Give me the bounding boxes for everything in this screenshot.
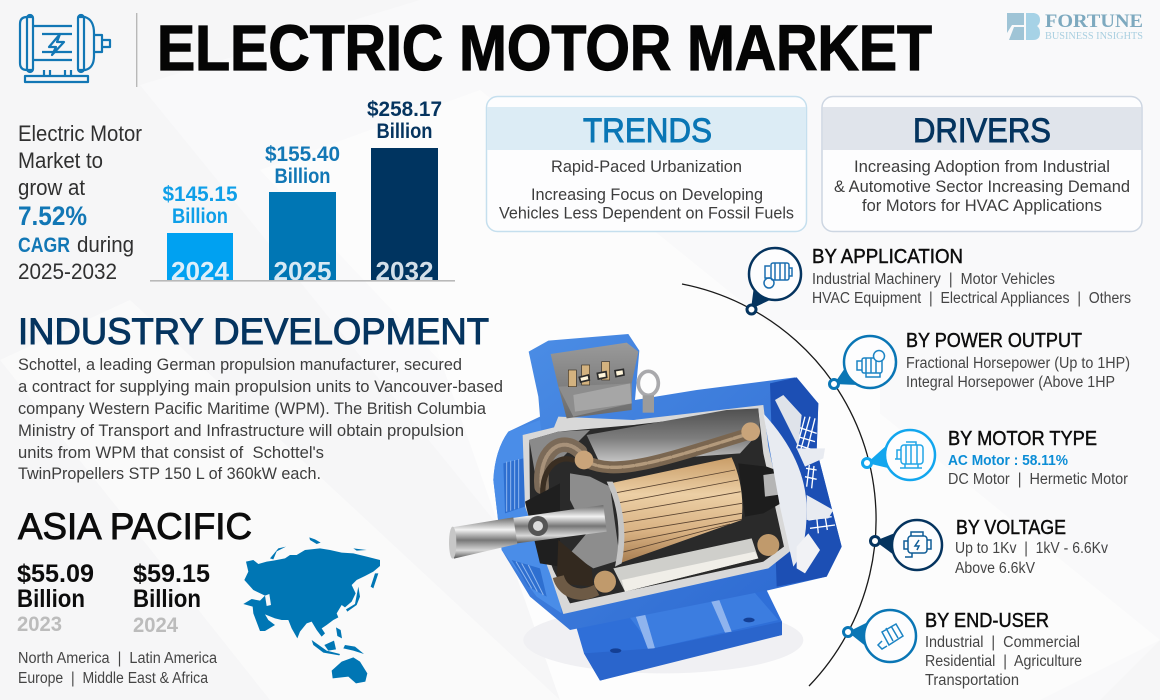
CAGR text block: 2025-2032 (18, 259, 117, 284)
segment: by motor type (862, 428, 1128, 488)
CAGR text block: Electric Motor (18, 121, 142, 146)
terminal box (551, 343, 638, 418)
segment: by end-user (844, 610, 1082, 689)
panel: trends: Increasing Focus on Developing (531, 185, 763, 204)
segment: by voltage: Up to 1Kv | 1kV - 6.6Kv (955, 540, 1108, 557)
segment: by motor type: BY MOTOR TYPE (948, 428, 1097, 450)
shaft (449, 505, 607, 559)
bar 2025: Billion (274, 164, 330, 188)
divider (136, 13, 137, 87)
stat: 2024 (133, 560, 210, 637)
icon: motor with gauge (857, 350, 884, 377)
stator lower (613, 538, 758, 592)
panel: drivers: DRIVERS (913, 112, 1051, 150)
illustration: electric motor cutaway (449, 334, 842, 681)
segment: by power output: Integral Horsepower (Above 1HP (906, 374, 1115, 391)
text block: industry development: units from WPM that consist of Schottel's (18, 443, 324, 462)
bar 2025: $155.40 (265, 142, 340, 166)
segment: by application: BY APPLICATION (812, 246, 963, 268)
housing (493, 334, 842, 630)
text block: industry development: TwinPropellers STP 150 L of 360kW each. (18, 464, 321, 483)
stator upper (587, 408, 760, 463)
panel: trends: TRENDS (583, 112, 712, 150)
bar 2024: $145.15 (162, 182, 238, 206)
segment: by motor type: DC Motor | Hermetic Motor (948, 471, 1128, 488)
logo: Fortune Business Insights: BUSINESS INSIGHTS (1045, 31, 1143, 42)
bar 2024: 2024 (171, 256, 230, 286)
segment: by motor type: AC Motor : 58.11% (948, 453, 1068, 469)
segment: by application: HVAC Equipment | Electrical Appliances | Others (812, 290, 1131, 307)
CAGR text block: CAGR (18, 234, 70, 257)
eye bolt (638, 371, 658, 413)
pin (830, 336, 896, 388)
stat: 2023: 2023 (17, 613, 62, 636)
stat: 2023: $55.09 (17, 560, 94, 588)
segment: by power output (830, 330, 1130, 391)
stat: 2024: $59.15 (133, 560, 210, 588)
icon: electric motor (20, 15, 110, 82)
bar 2032: 2032 (376, 256, 434, 286)
logo: Fortune Business Insights (1007, 11, 1143, 42)
rear bearing (738, 463, 787, 517)
text block: industry development: Schottel, a leading German propulsion manufacturer, secured (18, 355, 462, 374)
rotor (607, 457, 742, 567)
heading: asia pacific: ASIA PACIFIC (18, 506, 252, 547)
text block: other regions (18, 650, 217, 687)
CAGR text block (18, 121, 142, 284)
CAGR text block: Market to (18, 148, 103, 173)
bar 2032: Billion (376, 119, 432, 143)
heading: industry development: INDUSTRY DEVELOPMENT (18, 311, 489, 352)
text block: other regions: North America | Latin America (18, 650, 217, 667)
grill (797, 417, 835, 533)
panel: drivers: for Motors for HVAC Applications (862, 196, 1102, 215)
stat: 2024: 2024 (133, 614, 178, 637)
segment: by end-user: BY END-USER (925, 610, 1049, 632)
bar 2025 (265, 142, 340, 286)
end shield inner (570, 473, 620, 568)
stat: 2023 (17, 560, 94, 636)
segment: by end-user: Residential | Agriculture (925, 653, 1082, 670)
stat: 2024: Billion (133, 585, 201, 613)
fan (763, 395, 833, 573)
winding: upper (541, 433, 750, 507)
CAGR text block: 7.52% (18, 201, 87, 231)
bar chart (150, 97, 455, 286)
pin (844, 610, 916, 662)
icon: AC motor (895, 442, 923, 468)
text block: industry development: company Western Pacific Maritime (WPM). The British Columbia (18, 399, 487, 418)
pin (870, 520, 942, 570)
CAGR text block: grow at (18, 175, 85, 200)
segment: by application (747, 246, 1131, 314)
bar 2032: $258.17 (367, 97, 442, 121)
stat: 2023: Billion (17, 585, 85, 613)
panel: trends (486, 96, 806, 232)
bar 2032 (367, 97, 442, 286)
icon: engine (904, 532, 931, 557)
segment: by voltage: BY VOLTAGE (956, 517, 1066, 539)
bar 2025: 2025 (274, 256, 332, 286)
CAGR text block: during (77, 232, 134, 257)
bar 2024 (162, 182, 238, 286)
title: ELECTRIC MOTOR MARKET (157, 12, 932, 84)
pin (862, 430, 935, 480)
fan cover ribs (503, 458, 547, 597)
segment: by voltage: Above 6.6kV (955, 560, 1036, 577)
cutaway inner wall (523, 405, 792, 614)
segment: by end-user: Transportation (925, 672, 1019, 689)
text block: other regions: Europe | Middle East & Africa (18, 670, 208, 687)
segment: by power output: BY POWER OUTPUT (906, 330, 1082, 352)
panel: drivers (822, 96, 1142, 232)
motor feet (577, 583, 782, 681)
segment: by voltage (870, 517, 1108, 577)
text block: industry development: Ministry of Transport and Infrastructure will obtain propulsion (18, 421, 464, 440)
panel: trends: Rapid-Paced Urbanization (551, 157, 742, 176)
segment: by end-user: Industrial | Commercial (925, 634, 1080, 651)
text block: industry development (18, 355, 503, 483)
map: Asia Pacific (243, 537, 380, 683)
segment: by power output: Fractional Horsepower (Up to 1HP) (906, 355, 1130, 372)
panel: trends: Vehicles Less Dependent on Fossil Fuels (499, 204, 794, 222)
bar 2024: Billion (172, 204, 228, 228)
pin (747, 248, 801, 314)
panel: drivers: Increasing Adoption from Industrial (854, 157, 1110, 176)
logo: Fortune Business Insights: FORTUNE (1045, 11, 1143, 32)
text block: industry development: a contract for supplying main propulsion units to Vancouver-based (18, 377, 503, 396)
segment: by application: Industrial Machinery | Motor Vehicles (812, 271, 1055, 288)
panel: drivers: & Automotive Sector Increasing Demand (834, 177, 1130, 196)
icon: motor with bolt (878, 624, 903, 649)
arc: segmentation timeline (682, 284, 876, 686)
icon: gears and motor (764, 263, 792, 288)
